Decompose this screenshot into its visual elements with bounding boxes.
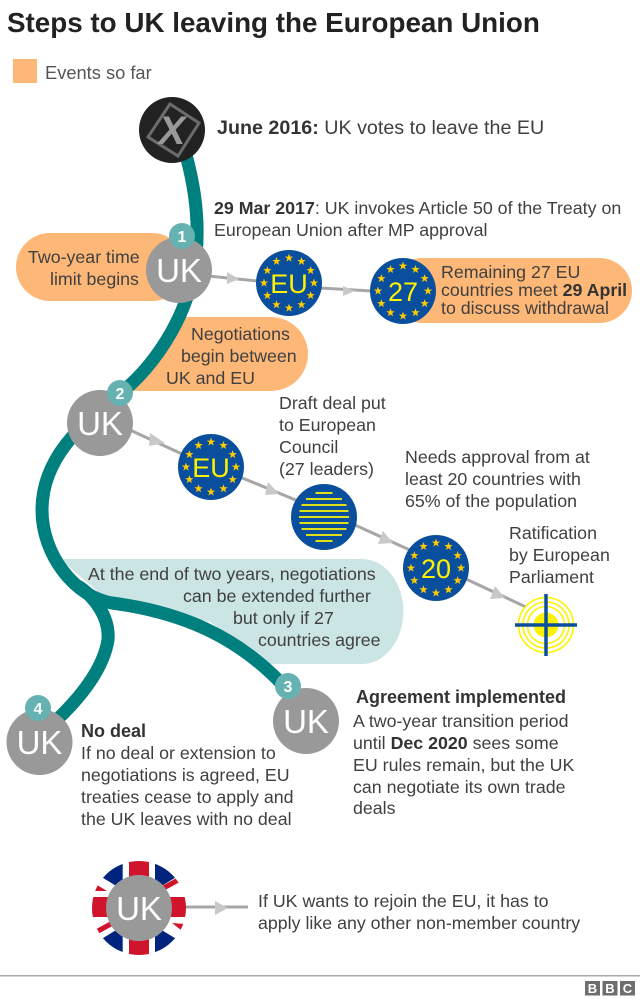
no deal text: the UK leaves with no deal (81, 809, 292, 829)
icon: European Council stripes (291, 484, 357, 550)
panel: negotiations pill (130, 317, 308, 391)
BBC logo: B (588, 981, 597, 996)
no deal text (81, 721, 294, 829)
ratification text: Parliament (509, 567, 594, 587)
extension text: At the end of two years, negotiations (88, 564, 376, 584)
icon: UK step 4: 4 (34, 701, 43, 718)
icon: UK step 4 (6, 695, 72, 775)
no deal text: If no deal or extension to (81, 743, 276, 763)
approval text: 65% of the population (405, 491, 577, 511)
remaining 27 text: Remaining 27 EU (441, 262, 580, 282)
arrow: EU to council (240, 477, 298, 501)
agreement text: A two-year transition period (353, 711, 568, 731)
extension text (88, 564, 381, 650)
no deal text: negotiations is agreed, EU (81, 765, 290, 785)
no deal text: No deal (81, 721, 146, 741)
icon: UK step 1 (146, 223, 212, 303)
BBC logo: C (623, 981, 633, 996)
extension text: but only if 27 (233, 608, 334, 628)
icon: UK step 2: 2 (116, 386, 125, 403)
agreement text: EU rules remain, but the UK (353, 755, 575, 775)
approval text: Needs approval from at (405, 447, 590, 467)
Article 50 text (214, 198, 621, 240)
icon: ballot cross: X (157, 109, 188, 153)
remaining 27 text (441, 262, 627, 318)
agreement text (353, 687, 575, 818)
negotiations text: UK and EU (166, 368, 255, 388)
arrow: rejoin (180, 901, 248, 915)
rejoin text: apply like any other non-member country (258, 913, 580, 933)
two-year limit text (28, 247, 140, 289)
icon: EU flag: EU (270, 269, 308, 299)
arrow: UK to EU (208, 272, 258, 284)
draft deal text: Council (279, 437, 338, 457)
Article 50 text: European Union after MP approval (214, 220, 487, 240)
icon: EU flag (256, 250, 322, 316)
icon: UK step 3: UK (283, 703, 329, 740)
negotiations text (166, 324, 297, 388)
negotiations text: begin between (181, 346, 297, 366)
agreement text: until Dec 2020 sees some (353, 733, 559, 753)
agreement text: deals (353, 798, 396, 818)
icon: parliament target (515, 594, 577, 656)
Article 50 text: 29 Mar 2017: UK invokes Article 50 of the Treaty on (214, 198, 621, 218)
icon: UK step 4: UK (17, 724, 62, 761)
icon: UK step 3: 3 (284, 679, 293, 696)
arrow: UK to EU second (130, 430, 182, 454)
legend (13, 59, 152, 83)
icon: EU flag second (178, 434, 244, 500)
timeline path (42, 155, 282, 728)
icon: 27 flag (370, 258, 436, 324)
ratification text (509, 523, 610, 587)
icon: UK step 1: UK (156, 252, 202, 289)
draft deal text: to European (279, 415, 376, 435)
extension text: countries agree (258, 630, 381, 650)
icon: UK step 1: 1 (178, 229, 187, 246)
draft deal text (279, 393, 386, 479)
arrow: EU to 27 (320, 286, 372, 296)
draft deal text: Draft deal put (279, 393, 386, 413)
panel: remaining 27 pill (390, 258, 632, 323)
remaining 27 text: countries meet 29 April (441, 280, 627, 300)
rejoin text: If UK wants to rejoin the EU, it has to (258, 891, 549, 911)
no deal text: treaties cease to apply and (81, 787, 294, 807)
panel: two-year limit pill (16, 233, 186, 301)
draft deal text: (27 leaders) (279, 459, 374, 479)
legend: Events so far (45, 62, 152, 83)
icon: union flag UK (92, 861, 186, 955)
icon: EU flag second: EU (192, 453, 230, 483)
approval text (405, 447, 590, 511)
agreement text: Agreement implemented (356, 687, 566, 707)
negotiations text: Negotiations (191, 324, 290, 344)
agreement text: can negotiate its own trade (353, 777, 566, 797)
BBC logo: B (605, 981, 615, 996)
icon: UK step 2: UK (77, 405, 123, 442)
extension text: can be extended further (183, 586, 371, 606)
arrow: council to 20 (355, 525, 412, 551)
icon: UK step 3 (273, 673, 339, 754)
approval text: least 20 countries with (405, 469, 581, 489)
two-year limit text: limit begins (50, 269, 139, 289)
icon: 27 flag: 27 (388, 277, 418, 307)
arrow: 20 to parliament (466, 579, 526, 607)
ratification text: by European (509, 545, 610, 565)
icon: 20 flag: 20 (421, 554, 451, 584)
ratification text: Ratification (509, 523, 597, 543)
icon: union flag UK: UK (116, 890, 162, 927)
rejoin text (258, 891, 580, 933)
remaining 27 text: to discuss withdrawal (441, 298, 609, 318)
title: Steps to UK leaving the European Union (7, 7, 540, 38)
icon: UK step 2 (67, 380, 133, 456)
icon: 20 flag (403, 535, 469, 601)
June 2016 text: June 2016: UK votes to leave the EU (217, 117, 544, 139)
two-year limit text: Two-year time (28, 247, 140, 267)
footer line (0, 975, 640, 976)
icon: ballot cross (139, 97, 205, 163)
BBC logo (585, 981, 635, 996)
panel: extension pill (60, 559, 403, 664)
